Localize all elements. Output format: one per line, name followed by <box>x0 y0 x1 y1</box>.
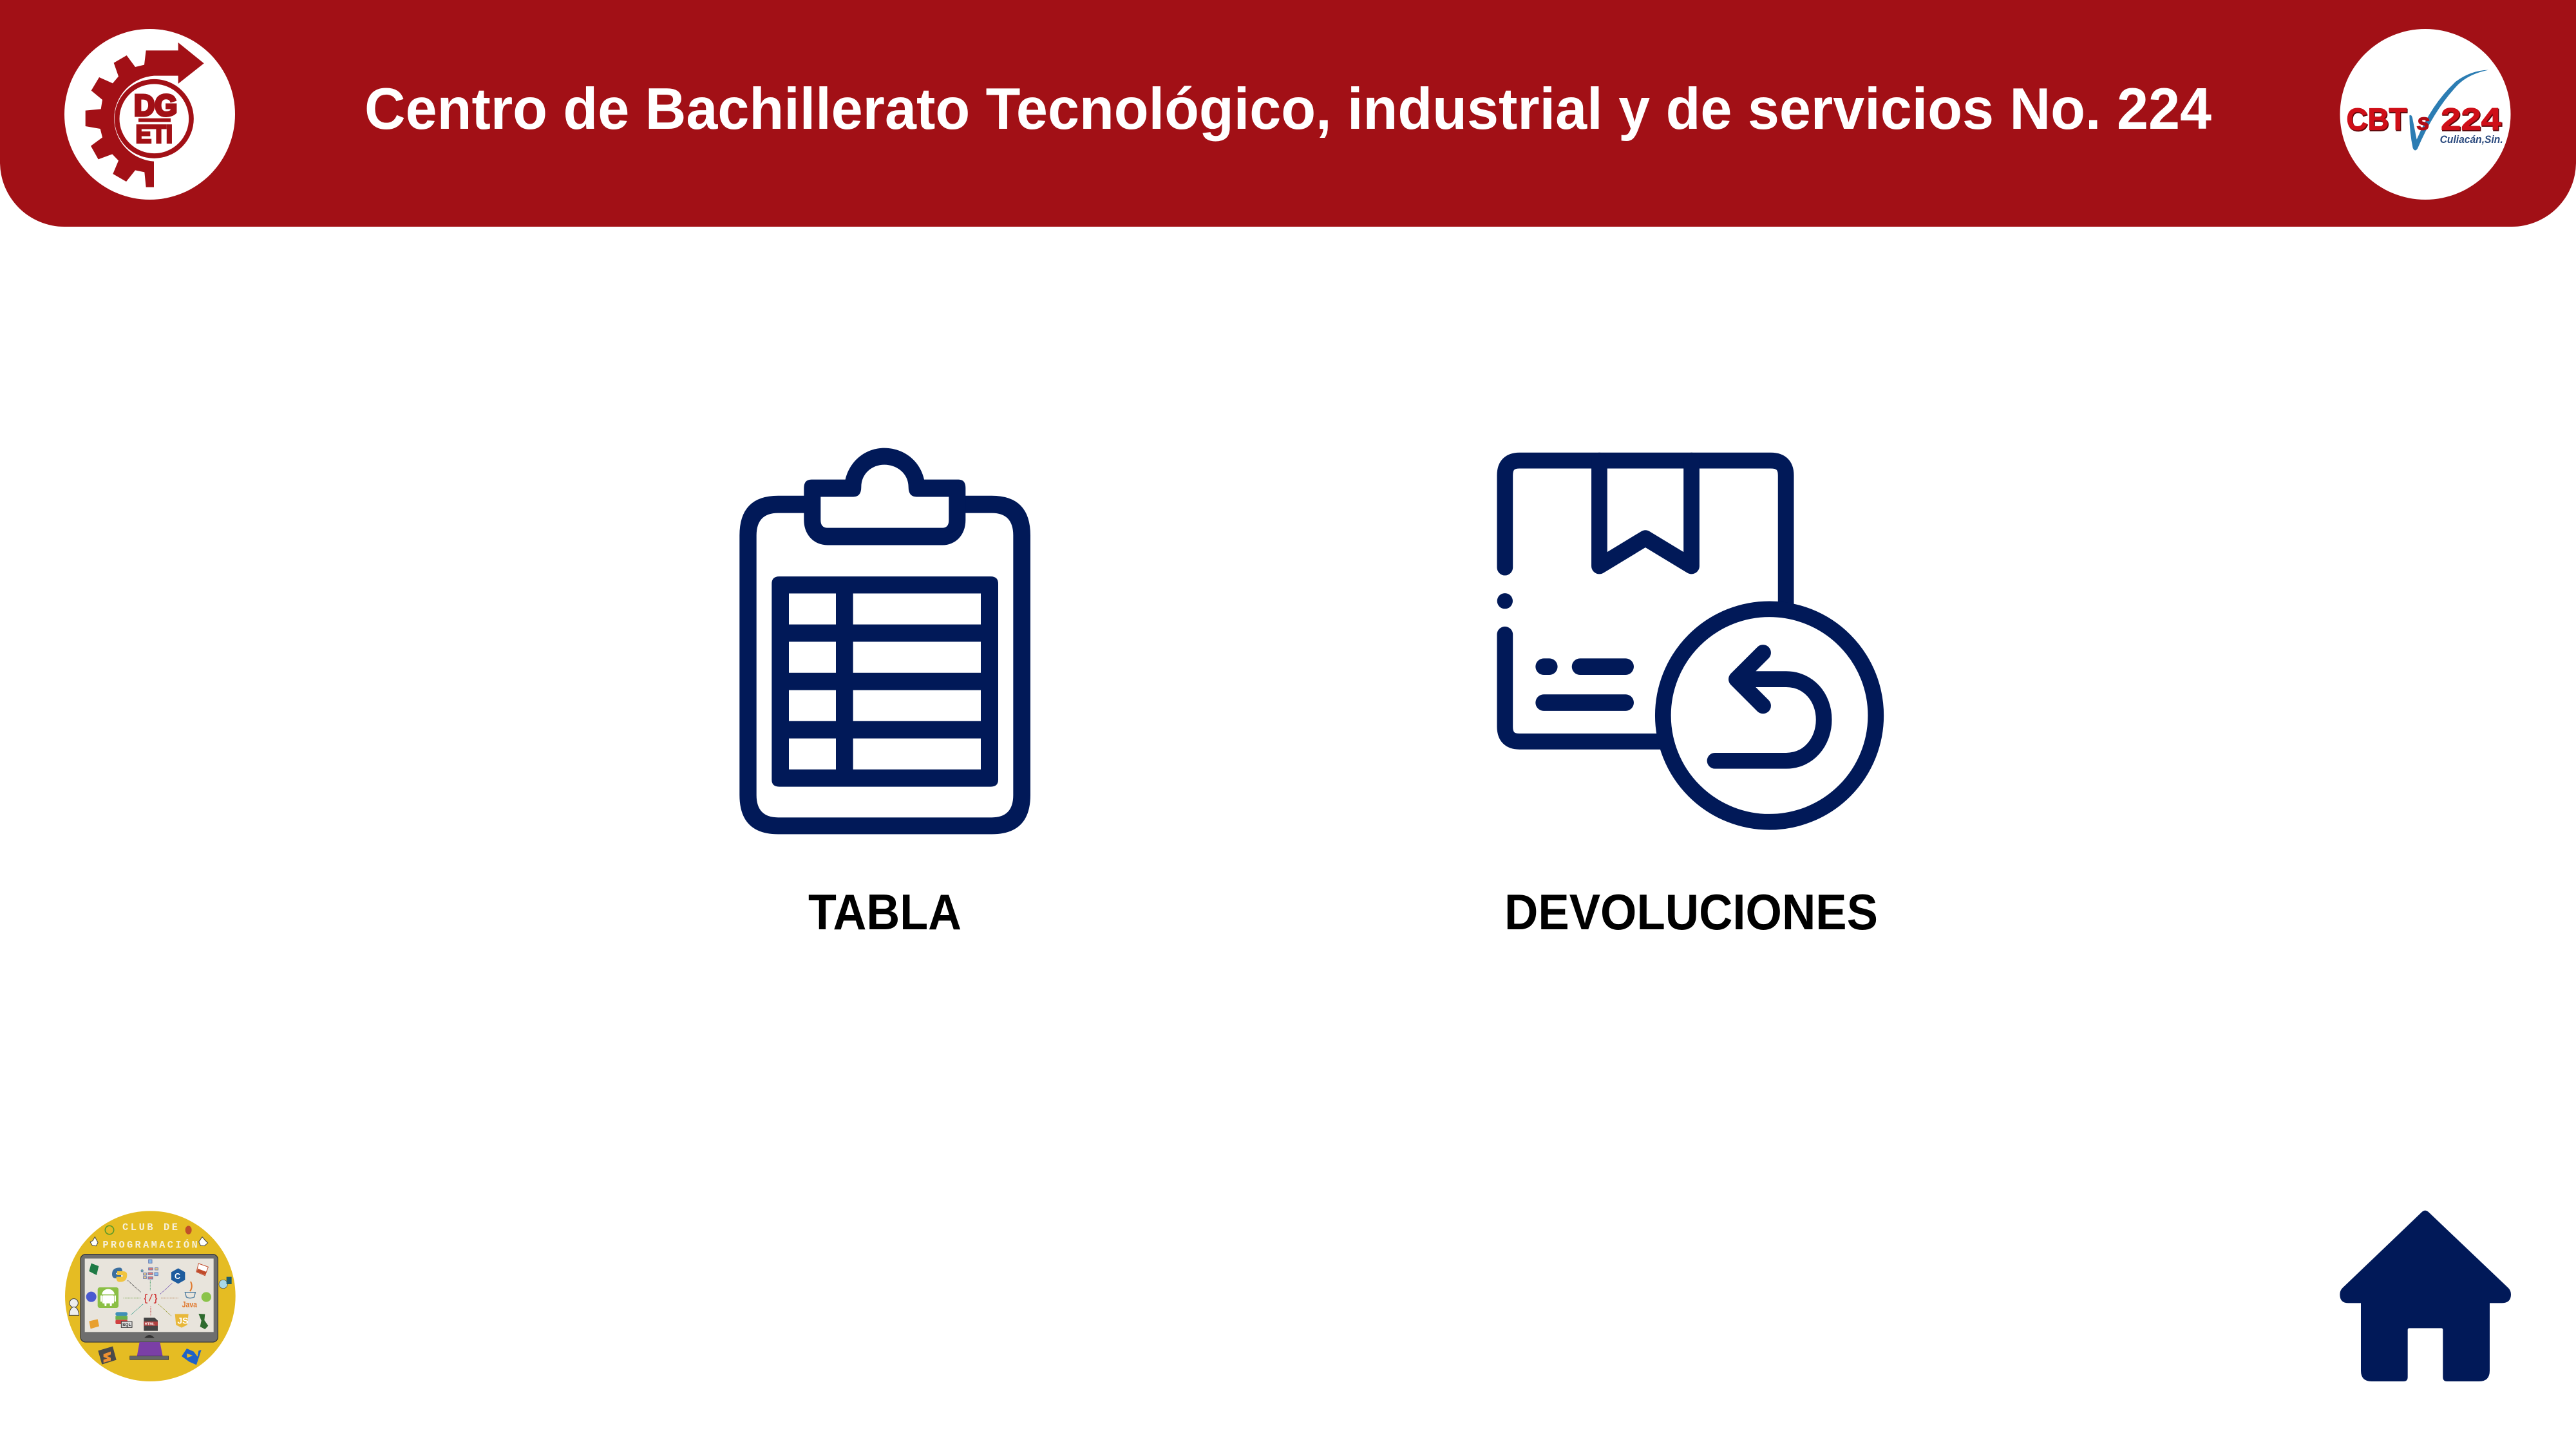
code symbol: {/} <box>144 1293 158 1305</box>
inner ring <box>117 82 191 156</box>
side robot icons <box>69 1277 232 1315</box>
DGETI lettering <box>134 89 177 148</box>
webcam arc <box>144 1335 155 1338</box>
logo: CBTis 224 <box>2340 29 2510 200</box>
cloud and bug icons <box>105 1226 192 1235</box>
python icon <box>112 1267 127 1282</box>
table grid <box>772 576 998 787</box>
CBTs 224 lettering: CBT <box>2346 102 2407 137</box>
club heading <box>102 1222 198 1251</box>
return circle <box>1663 609 1876 822</box>
dotted connector lines <box>124 1280 178 1316</box>
monitor base <box>130 1356 169 1359</box>
CBTs 224 lettering: 224 <box>2441 103 2502 138</box>
label lines <box>1544 667 1625 703</box>
SQL icon: SQL <box>122 1323 131 1327</box>
gear and arrow <box>86 43 204 187</box>
C++ icon: C <box>175 1272 180 1281</box>
check mark <box>2409 70 2488 151</box>
wattpad icon <box>202 1292 211 1302</box>
DGETI lettering: DG <box>134 89 177 122</box>
header banner <box>0 0 2576 227</box>
flow chart icon <box>141 1260 158 1279</box>
CBTs 224 lettering <box>2346 102 2503 146</box>
ribbon <box>1599 460 1692 566</box>
DGETI lettering: ETI <box>136 120 173 148</box>
return arrow <box>1715 652 1824 761</box>
box dot <box>1497 593 1513 609</box>
JS icon <box>175 1314 189 1328</box>
CBTs 224 lettering: Culiacán,Sin. <box>2440 133 2503 146</box>
CBTs 224 lettering: CBT <box>2347 103 2408 138</box>
android icon <box>98 1287 118 1308</box>
club heading: PROGRAMACIÓN <box>102 1239 198 1251</box>
club heading: CLUB DE <box>122 1222 178 1233</box>
icon: home <box>2340 1211 2511 1381</box>
SQL icon <box>115 1312 132 1327</box>
clipboard body <box>739 496 1030 834</box>
excel icon <box>89 1264 99 1275</box>
sublime icon <box>98 1347 117 1365</box>
ppt icon <box>196 1264 208 1276</box>
label: TABLA: TABLA <box>808 884 961 940</box>
logo: DGETI <box>64 29 235 200</box>
vscode icon <box>182 1349 202 1365</box>
html icon <box>144 1318 158 1331</box>
java icon <box>182 1282 198 1309</box>
cloud alert icon <box>89 1319 99 1329</box>
clip <box>804 448 965 545</box>
box outline <box>1505 460 1786 741</box>
label: DEVOLUCIONES: DEVOLUCIONES <box>1504 884 1878 940</box>
html icon: HTML <box>145 1322 155 1326</box>
C++ icon <box>171 1268 185 1283</box>
icon: box with return arrow <box>1497 460 1876 822</box>
monitor stand <box>137 1342 163 1356</box>
creeper icon <box>198 1314 208 1329</box>
CBTs 224 lettering: 224 <box>2441 102 2501 137</box>
title: Centro de Bachillerato Tecnológico, industrial y de servicios No. 224 <box>365 77 2211 142</box>
canva icon <box>86 1292 97 1302</box>
icon: clipboard table <box>739 448 1030 834</box>
JS icon: JS <box>177 1315 188 1325</box>
logo: Club de Programación <box>65 1211 236 1381</box>
java icon: Java <box>182 1300 198 1309</box>
CBTs 224 lettering: s <box>2417 108 2430 135</box>
monitor screen <box>85 1258 214 1332</box>
monitor <box>80 1255 218 1342</box>
pointer hand icons <box>90 1237 208 1246</box>
